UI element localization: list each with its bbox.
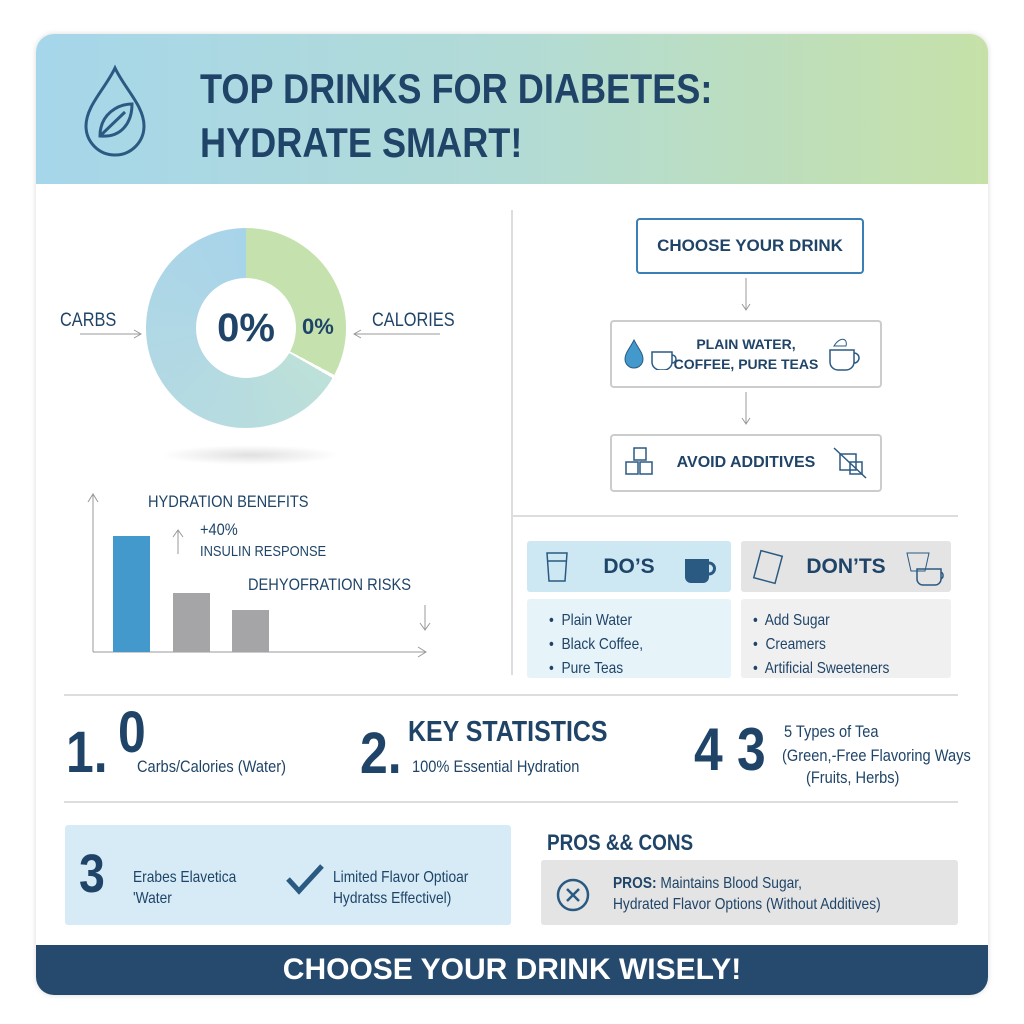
stat 3 <box>694 716 971 787</box>
center label: 0% <box>217 306 275 350</box>
stat 3: 4 3 <box>694 716 766 783</box>
title: HYDRATE SMART! <box>200 119 522 166</box>
flow box: plain water: COFFEE, PURE TEAS <box>674 356 818 372</box>
panel: water callout <box>65 825 511 925</box>
panel: don'ts: DON’TS <box>806 555 886 578</box>
panel: don'ts: • Add Sugar <box>753 612 830 629</box>
panel: water callout: 3 <box>79 844 105 904</box>
label: calories: CALORIES <box>372 310 455 331</box>
flow box: choose: CHOOSE YOUR DRINK <box>657 236 843 255</box>
text: HYDRATION BENEFITS <box>148 492 309 511</box>
panel: do's <box>527 541 731 678</box>
footer banner: CHOOSE YOUR DRINK WISELY! <box>283 953 741 986</box>
panel: do's: DO’S <box>603 555 655 578</box>
panel: pros: PROS: Maintains Blood Sugar, <box>613 875 802 892</box>
flow box: plain water: PLAIN WATER, <box>696 336 796 352</box>
header <box>36 34 988 184</box>
flow box: choose <box>636 218 864 274</box>
panel: do's: • Pure Teas <box>549 660 623 677</box>
panel: don'ts <box>741 541 951 678</box>
stat 3: (Green,-Free Flavoring Ways <box>782 746 971 765</box>
stat 1: 1. <box>66 720 108 785</box>
bar chart <box>88 493 430 658</box>
green label: 0% <box>302 314 334 339</box>
stat 1 <box>66 700 286 785</box>
stat 3: (Fruits, Herbs) <box>806 768 899 787</box>
stat 1: 0 <box>118 700 146 765</box>
panel: water callout: Erabes Elavetica <box>133 869 236 886</box>
panel: pros <box>541 860 958 925</box>
panel: water callout: Limited Flavor Optioar <box>333 869 468 886</box>
panel: water callout: 'Water <box>133 890 172 907</box>
panel: don'ts: • Creamers <box>753 636 826 653</box>
panel: water callout: Hydratss Effectivel) <box>333 890 451 907</box>
footer banner <box>36 945 988 995</box>
panel: do's: • Black Coffee, <box>549 636 643 653</box>
flow box: avoid additives <box>610 434 882 492</box>
icon: check <box>286 864 324 895</box>
flow box: avoid additives: AVOID ADDITIVES <box>677 454 815 471</box>
title <box>200 65 712 166</box>
stat 2: 2. <box>360 721 402 786</box>
icon: drop with leaf <box>84 64 146 156</box>
stat 1: Carbs/Calories (Water) <box>137 757 286 776</box>
text: +40% <box>200 520 238 539</box>
stat 2: 100% Essential Hydration <box>412 757 579 776</box>
title: TOP DRINKS FOR DIABETES: <box>200 65 712 112</box>
panel: do's: • Plain Water <box>549 612 632 629</box>
text: INSULIN RESPONSE <box>200 543 326 560</box>
panel: don'ts: • Artificial Sweeteners <box>753 660 889 677</box>
donut chart <box>146 228 346 428</box>
stat 3: 5 Types of Tea <box>784 722 879 741</box>
stat 2 <box>360 716 608 786</box>
flow box: plain water <box>610 320 882 388</box>
label: carbs: CARBS <box>60 310 116 331</box>
panel: pros: Hydrated Flavor Options (Without Additives) <box>613 896 881 913</box>
text: DEHYOFRATION RISKS <box>248 575 411 594</box>
stat 2: KEY STATISTICS <box>408 716 608 748</box>
heading: pros & cons: PROS && CONS <box>547 830 693 855</box>
